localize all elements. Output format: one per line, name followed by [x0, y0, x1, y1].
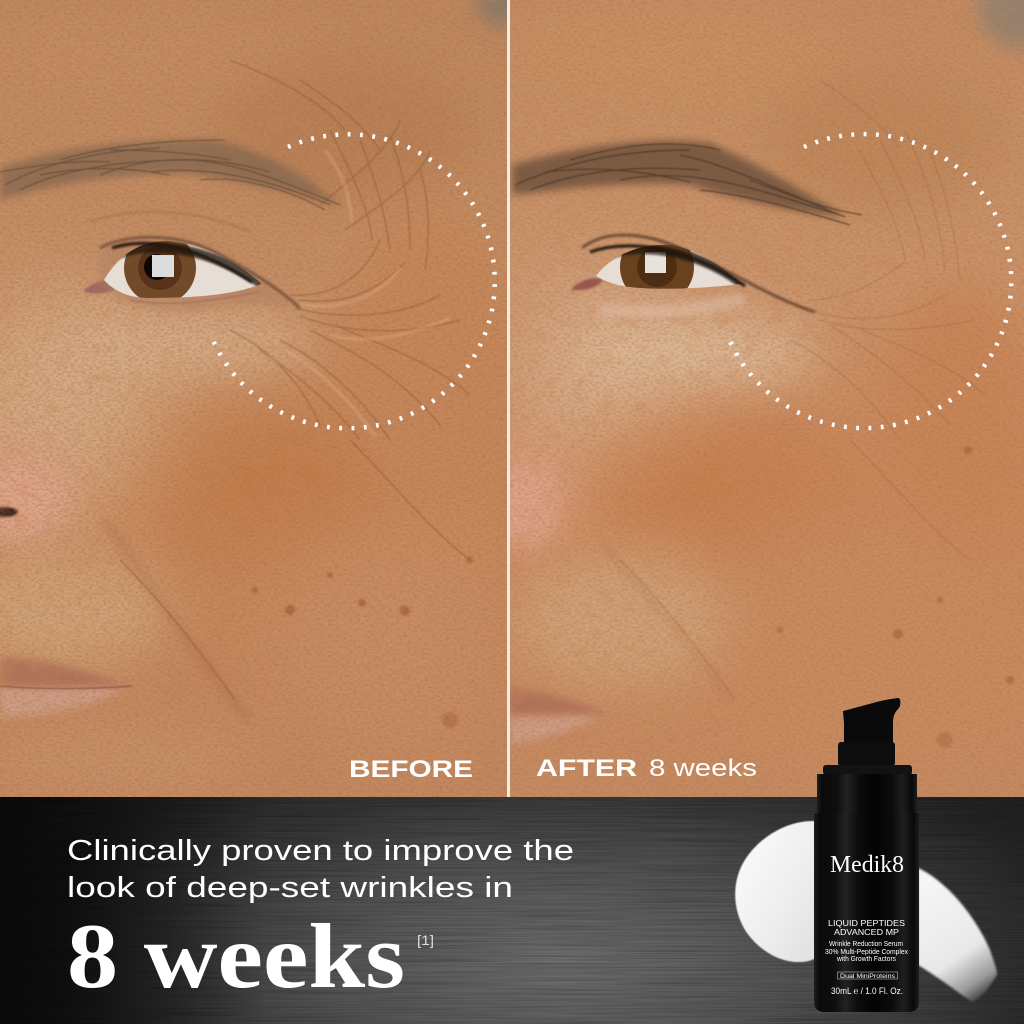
- brown spots: [777, 446, 1014, 748]
- upper body: [817, 774, 917, 814]
- wrinkles: crow's feet after: [620, 80, 985, 700]
- panel: brushed metal footer: [0, 797, 1024, 1024]
- nasolabial fold: [600, 540, 730, 700]
- pump nozzle: [843, 698, 900, 742]
- eye: after: [572, 230, 815, 312]
- product name: [828, 918, 905, 937]
- cream swatch: left blob: [735, 821, 816, 962]
- nose: [480, 440, 570, 550]
- lips: [0, 658, 132, 718]
- eyebrow: before: [0, 140, 340, 210]
- pore texture: [0, 0, 507, 797]
- product description: 30% Multi-Peptide Complex: [825, 947, 908, 956]
- heading: clinical claim: [67, 835, 574, 904]
- nasolabial fold: [107, 524, 244, 712]
- product name: ADVANCED MP: [834, 927, 899, 937]
- product description: [825, 939, 908, 963]
- highlights between wrinkles: [285, 150, 450, 436]
- pore texture: [510, 0, 1024, 797]
- label: after 8 weeks: 8 weeks: [649, 755, 757, 782]
- freckles: [0, 380, 507, 797]
- label: after 8 weeks: [536, 755, 757, 782]
- nose: [0, 447, 77, 543]
- brand name: Medik8: [830, 852, 904, 878]
- dotted circle: after: [730, 134, 1011, 428]
- footnote marker: [1]: [417, 932, 434, 948]
- volume: 30mL ℮ / 1.0 Fl. Oz.: [831, 986, 903, 996]
- pump collar: [838, 742, 895, 766]
- photo: after: [480, 0, 1024, 797]
- heading: clinical claim: Clinically proven to improve the: [67, 835, 574, 867]
- brown spots: [252, 557, 473, 728]
- badge: dual miniproteins: [838, 972, 898, 980]
- divider: [507, 0, 510, 797]
- heading: clinical claim: look of deep-set wrinkles in: [67, 872, 513, 904]
- eyebrow: after: [512, 141, 862, 225]
- product bottle: [814, 698, 919, 1012]
- wrinkles: crow's feet before: [120, 60, 470, 700]
- label: before: BEFORE: [349, 756, 473, 783]
- label: after 8 weeks: AFTER: [536, 755, 637, 782]
- crease above eye: [90, 212, 250, 232]
- lips: [510, 688, 608, 744]
- badge: dual miniproteins: Dual MiniProteins: [840, 974, 895, 980]
- big number: 8 weeks: 8 weeks: [67, 905, 405, 1007]
- shoulder ring: [823, 765, 912, 775]
- main body: [814, 813, 919, 1012]
- dotted circle: before: [213, 134, 495, 428]
- photo: before: [0, 0, 535, 800]
- freckles: [510, 380, 1024, 797]
- cream swatch: right smear: [918, 868, 997, 1002]
- product description: Wrinkle Reduction Serum: [829, 939, 903, 948]
- eye: before: [84, 232, 305, 312]
- product name: LIQUID PEPTIDES: [828, 918, 905, 928]
- product description: with Growth Factors: [836, 954, 896, 963]
